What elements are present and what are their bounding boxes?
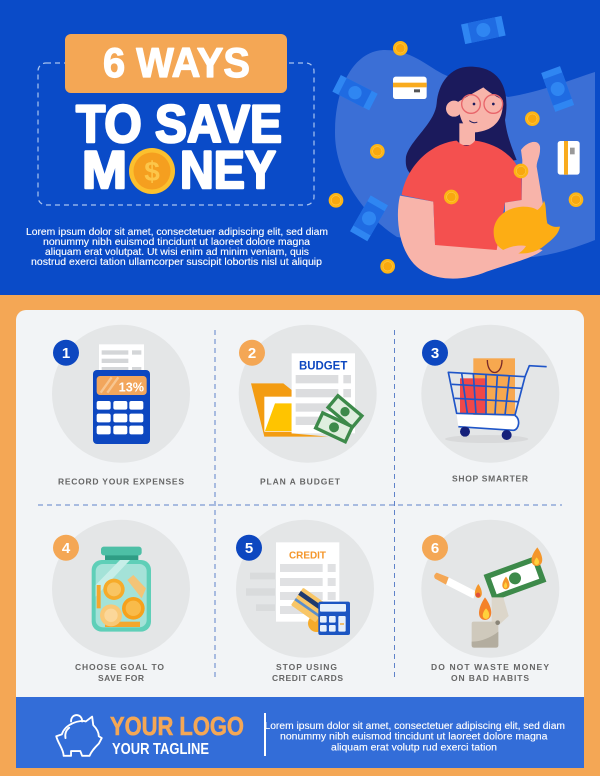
title badge: 6 ways xyxy=(65,34,287,93)
step number badges: 3 xyxy=(431,345,439,362)
step labels: PLAN A BUDGET xyxy=(260,476,341,486)
title: to save money: TO SAVE xyxy=(76,95,282,154)
step number badges xyxy=(53,340,448,561)
step number badges: 4 xyxy=(62,540,71,557)
dashed title frame xyxy=(38,63,314,205)
page border background xyxy=(0,295,600,776)
icon: burning money and lighter xyxy=(434,547,546,648)
intro text: Lorem ipsum dolor sit amet, consectetuer adipiscing elit, sed diam xyxy=(26,227,328,238)
title: to save money: M xyxy=(82,141,127,200)
logo text: YOUR LOGO xyxy=(110,711,244,741)
step labels: RECORD YOUR EXPENSES xyxy=(58,476,184,486)
step number badges: 1 xyxy=(62,345,70,362)
footer text xyxy=(264,721,565,754)
step labels: SAVE FOR xyxy=(98,673,144,683)
step labels: ON BAD HABITS xyxy=(451,673,529,683)
step labels: CREDIT CARDS xyxy=(272,673,343,683)
icon: piggy logo xyxy=(56,715,102,756)
icon: budget folder xyxy=(251,353,364,444)
footer divider xyxy=(264,713,266,756)
icon: calculator with receipt xyxy=(93,344,150,444)
panel: six ways xyxy=(16,310,584,697)
icon: credit cards xyxy=(393,77,580,175)
icon: credit document and calculator xyxy=(246,542,350,635)
step labels xyxy=(58,474,549,683)
step labels: CHOOSE GOAL TO xyxy=(75,662,164,672)
title: to save money: NEY xyxy=(180,141,276,200)
hero backdrop blob xyxy=(335,50,595,257)
icon: coins xyxy=(329,41,583,274)
step labels: SHOP SMARTER xyxy=(452,474,528,484)
step circles xyxy=(52,325,559,658)
title: to save money: $ xyxy=(144,156,160,187)
woman with piggy bank xyxy=(398,67,560,279)
step labels: DO NOT WASTE MONEY xyxy=(431,662,549,672)
logo text xyxy=(110,711,244,758)
step number badges: 6 xyxy=(431,540,439,557)
footer band xyxy=(16,697,584,768)
hero illustration xyxy=(329,16,583,279)
intro text: nostrud exerci tation ullamcorper suscipit lobortis nisl ut aliquip xyxy=(31,257,322,268)
intro text: aliquam erat volutpat. Ut wisi enim ad minim veniam, quis xyxy=(45,247,309,258)
icon: calculator with receipt: 13% xyxy=(119,381,144,395)
footer text: Lorem ipsum dolor sit amet, consectetuer adipiscing elit, sed diam xyxy=(264,721,565,732)
step labels: STOP USING xyxy=(276,662,337,672)
icon: budget folder: BUDGET xyxy=(299,358,348,372)
intro text xyxy=(26,227,328,268)
logo text: YOUR TAGLINE xyxy=(112,741,209,758)
step number badges: 2 xyxy=(248,345,256,362)
title: to save money xyxy=(76,95,282,200)
intro text: nonummy nibh euismod tincidunt ut laoreet dolore magna xyxy=(43,237,310,248)
footer text: nonummy nibh euismod tincidunt ut laoreet dolore magna xyxy=(280,732,548,742)
icon: coin jar xyxy=(92,547,151,632)
icon: credit document and calculator: CREDIT xyxy=(289,550,326,561)
footer text: aliquam erat volutp rud exerci tation xyxy=(331,742,497,754)
icon: banknotes xyxy=(332,16,574,241)
header background xyxy=(0,0,600,295)
icon: shopping cart xyxy=(445,358,547,443)
step number badges: 5 xyxy=(245,540,253,557)
title badge: 6 ways: 6 WAYS xyxy=(103,39,250,86)
